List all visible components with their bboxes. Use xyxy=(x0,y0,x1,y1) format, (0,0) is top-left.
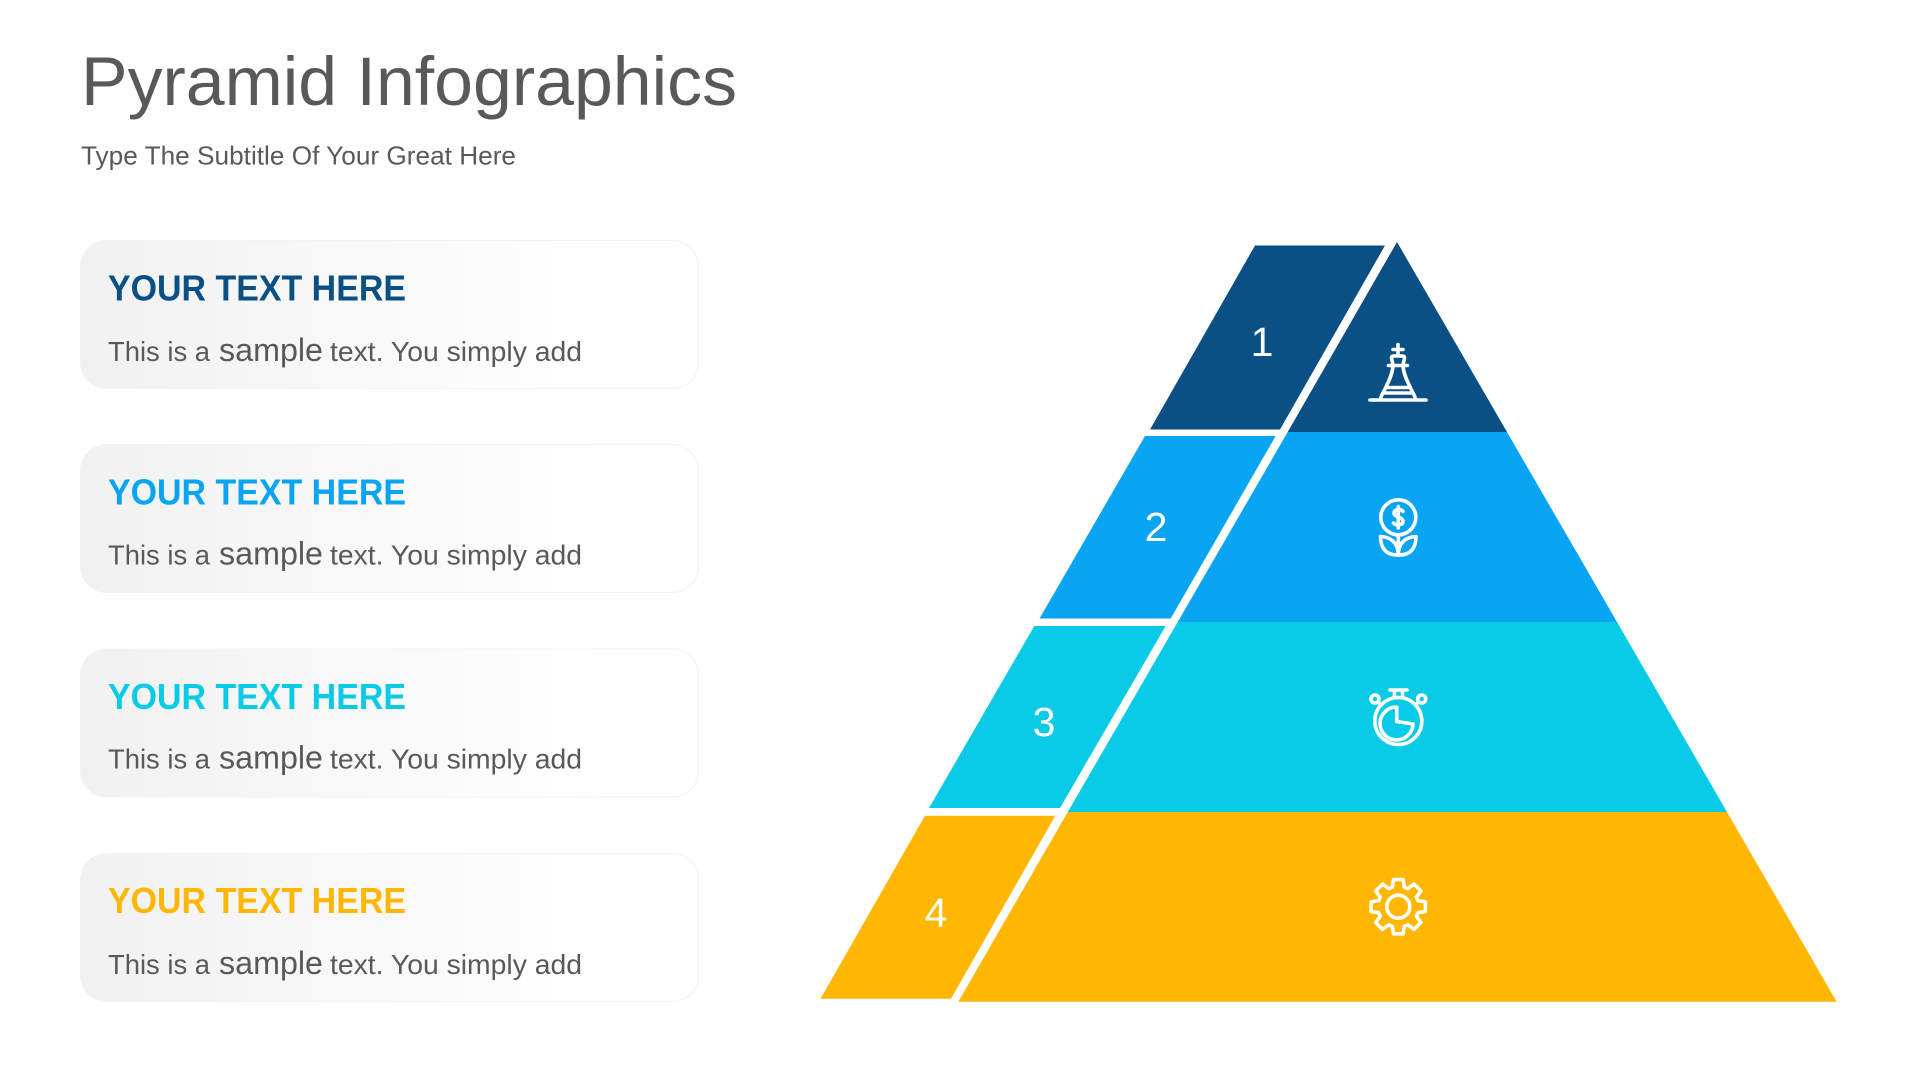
panel: card 1: sample xyxy=(219,332,323,368)
panel: card 3: sample xyxy=(219,740,323,776)
panel: card 3: YOUR TEXT HERE xyxy=(108,676,406,717)
number tab 2 xyxy=(1040,436,1276,618)
panel: card 4: This is a xyxy=(108,949,210,980)
panel: card 3 xyxy=(80,649,698,797)
number 3: 3 xyxy=(1033,699,1055,745)
pyramid level 3 xyxy=(929,622,1727,812)
band 2 xyxy=(1178,432,1617,622)
icon: money flower xyxy=(1380,500,1416,555)
subtitle: Type The Subtitle Of Your Great Here xyxy=(81,140,516,170)
panel: card 3: This is a xyxy=(108,744,210,774)
panel: card 1: This is a xyxy=(108,336,210,367)
panel: card 4: text. You simply add xyxy=(330,949,582,980)
panel: card 2: This is a xyxy=(108,540,210,570)
panel: card 1 xyxy=(80,240,698,388)
pyramid tip xyxy=(1288,242,1507,432)
panel: card 4: sample xyxy=(219,945,323,981)
panel: card 2: text. You simply add xyxy=(330,540,582,570)
number tab 3 xyxy=(929,626,1166,808)
band 3 xyxy=(1068,622,1727,812)
panel: card 3: text. You simply add xyxy=(330,744,582,774)
number tab 4 xyxy=(820,816,1055,999)
icon: stopwatch xyxy=(1371,690,1426,744)
title: Pyramid Infographics xyxy=(81,43,737,120)
panel: card 4 xyxy=(80,854,698,1002)
icon: gear xyxy=(1371,880,1425,934)
number 2: 2 xyxy=(1145,504,1167,550)
panel: card 2 xyxy=(80,444,698,592)
pyramid level 4 xyxy=(820,812,1837,1002)
panel: card 2: sample xyxy=(219,536,323,572)
number 1: 1 xyxy=(1251,319,1273,365)
panel: card 4: YOUR TEXT HERE xyxy=(108,880,406,921)
icon: chess king xyxy=(1370,344,1426,400)
panel: card 1: YOUR TEXT HERE xyxy=(108,268,406,308)
band 4 xyxy=(958,812,1837,1002)
number tab 1 xyxy=(1150,246,1385,430)
pyramid level 2 xyxy=(1040,432,1617,622)
number 4: 4 xyxy=(925,890,947,936)
pyramid level 1 xyxy=(1150,242,1507,432)
panel: card 1: text. You simply add xyxy=(330,336,582,367)
panel: card 2: YOUR TEXT HERE xyxy=(108,472,406,512)
